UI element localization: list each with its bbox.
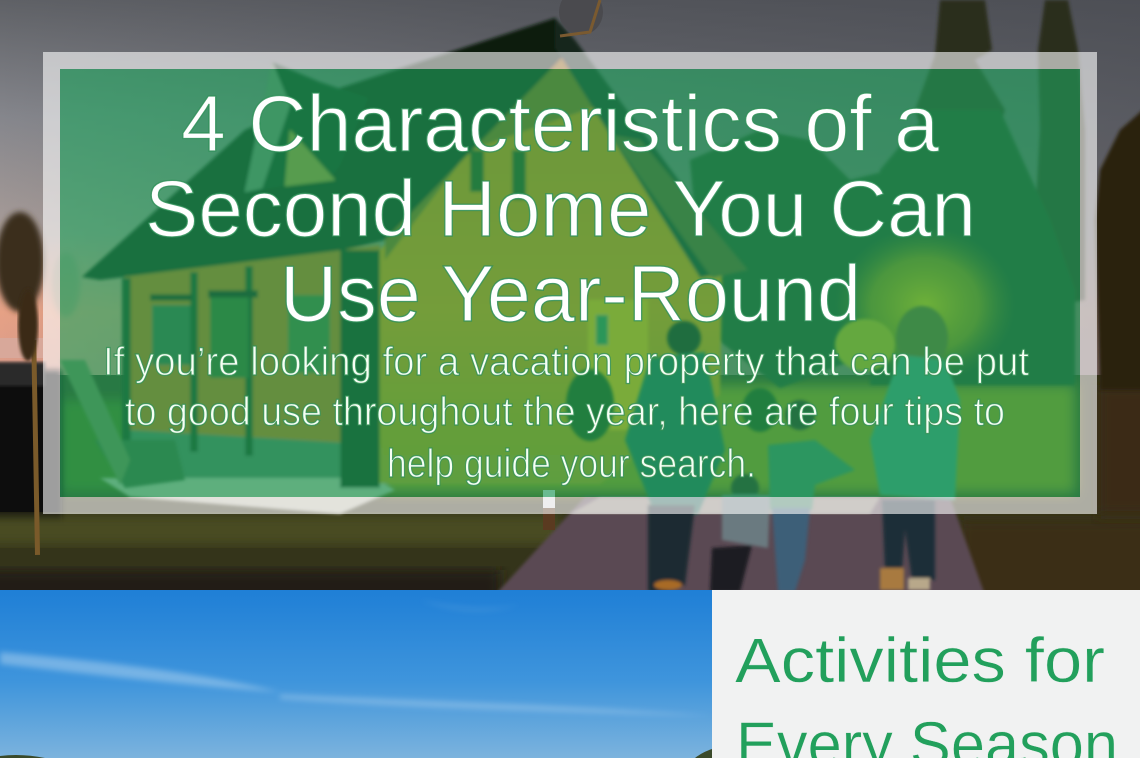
section heading (735, 626, 1118, 758)
title (145, 79, 976, 338)
section heading: Activities for (735, 626, 1105, 696)
section panel: activities (712, 590, 1140, 758)
distant hills (0, 749, 712, 758)
lit tree glow (833, 236, 1004, 372)
left tree (0, 212, 80, 555)
dusk sky (0, 0, 1140, 390)
right side trees (690, 0, 1140, 390)
porch floor (100, 478, 395, 514)
house (82, 18, 748, 514)
right roof slope (553, 18, 712, 278)
sky gradient (0, 590, 712, 758)
title card green panel (60, 69, 1080, 497)
bright gable wall (380, 48, 722, 484)
wispy clouds (0, 606, 676, 716)
title: Second Home You Can (145, 164, 976, 253)
front door (588, 300, 648, 430)
title: Use Year-Round (280, 249, 861, 338)
intro text: help guide your search. (387, 442, 756, 486)
gravel path (495, 497, 985, 595)
distant water and hills (0, 338, 45, 386)
dormer (272, 62, 338, 111)
wooden posts (122, 278, 131, 448)
family: father, child, daughter, mother (625, 306, 960, 592)
intro text (103, 340, 1029, 486)
gable windows (470, 150, 484, 192)
ground and grass (0, 370, 1140, 610)
main roof plane (82, 18, 570, 280)
windows (152, 305, 190, 365)
lower wooden wall (125, 245, 380, 465)
title card frame (43, 52, 1097, 514)
intro text: If you’re looking for a vacation property that can be put (103, 340, 1029, 384)
garden lamp post (543, 490, 555, 530)
blue sky photo (0, 590, 712, 758)
shrubs and porch stairs (60, 360, 778, 488)
satellite dish (559, 0, 603, 36)
title: 4 Characteristics of a (181, 79, 940, 168)
intro text: to good use throughout the year, here are four tips to (125, 390, 1005, 434)
foundation (128, 428, 343, 479)
